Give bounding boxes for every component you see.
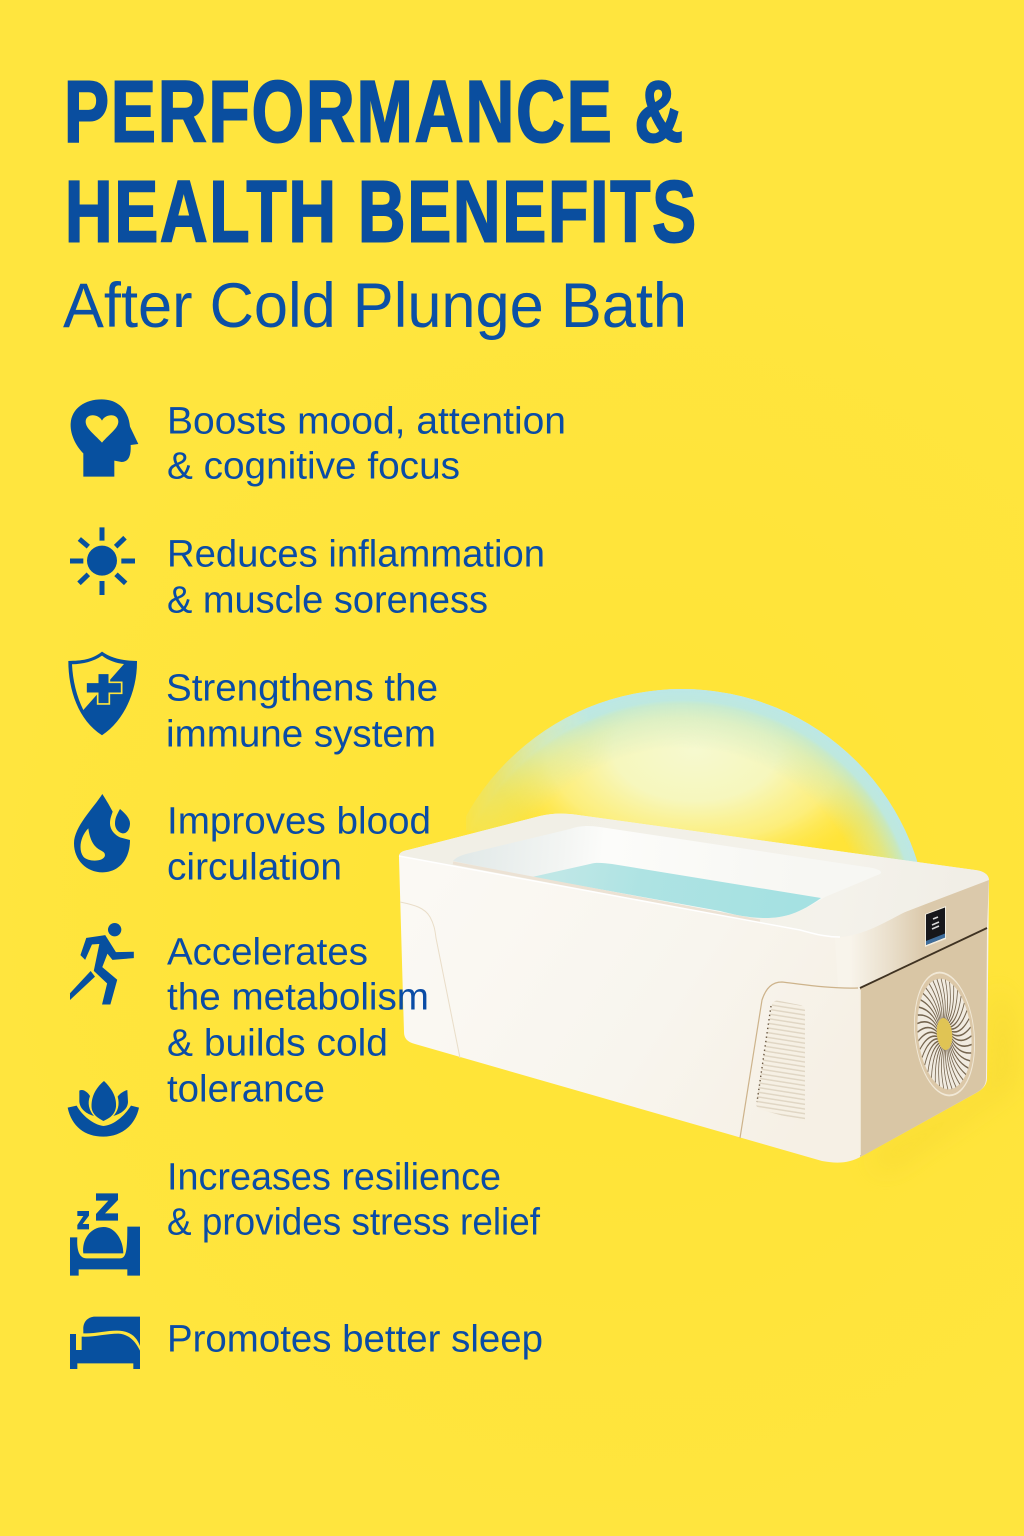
basin — [453, 826, 881, 918]
subtitle: After Cold Plunge Bath — [63, 271, 687, 341]
benefit: resilience and stress relief — [68, 1081, 540, 1244]
benefit: better sleep: Promotes better sleep — [167, 1318, 543, 1360]
benefit: mood and focus — [71, 399, 566, 488]
benefit: mood and focus: Boosts mood, attention — [167, 400, 566, 442]
dome over tub — [466, 689, 918, 862]
icon: shield with cross — [68, 652, 137, 735]
fan — [906, 961, 984, 1107]
icon: bed — [70, 1317, 140, 1369]
benefit: immune system: immune system — [166, 714, 436, 756]
benefit: resilience and stress relief: Increases resilience — [167, 1156, 501, 1198]
benefit: metabolism and cold tolerance: & builds cold — [167, 1022, 388, 1064]
panel seams — [400, 902, 987, 1155]
benefit: inflammation — [70, 527, 545, 622]
tub body — [399, 814, 989, 1163]
benefit: resilience and stress relief: & provides stress relief — [167, 1202, 540, 1244]
benefit: metabolism and cold tolerance: tolerance — [167, 1068, 325, 1110]
benefit: inflammation: & muscle soreness — [167, 580, 488, 622]
benefit: better sleep — [70, 1317, 543, 1369]
benefit: metabolism and cold tolerance — [70, 923, 429, 1110]
infographic canvas — [63, 80, 989, 1369]
benefit: metabolism and cold tolerance: the metabolism — [167, 976, 429, 1018]
benefit: mood and focus: & cognitive focus — [167, 446, 460, 488]
vent — [756, 1001, 805, 1122]
front lip highlights — [399, 856, 840, 937]
title — [64, 64, 698, 260]
title: PERFORMANCE & — [64, 64, 685, 160]
benefit: metabolism and cold tolerance: Accelerates — [167, 932, 368, 974]
tub rim top — [399, 814, 989, 937]
control display — [925, 906, 946, 947]
benefit: blood circulation: Improves blood — [167, 800, 431, 842]
product illustration: cold plunge tub — [399, 689, 1012, 1183]
benefit: blood circulation: circulation — [167, 846, 342, 888]
benefit: immune system: Strengthens the — [166, 668, 438, 710]
title: HEALTH BENEFITS — [65, 164, 698, 260]
water — [532, 863, 821, 918]
benefit: inflammation: Reduces inflammation — [167, 534, 545, 576]
icon: sleeping person in bed — [70, 1193, 140, 1276]
icon: runner — [70, 923, 133, 1004]
benefit: blood circulation — [74, 794, 431, 888]
benefit: immune system — [68, 652, 438, 756]
icon: water drops — [74, 794, 130, 872]
tub side panel — [860, 928, 987, 1157]
icon: sun — [70, 527, 135, 595]
icon: head with heart — [71, 399, 138, 477]
tub shadow — [870, 980, 1012, 1170]
icon: lotus — [68, 1081, 139, 1137]
tub upper band — [835, 879, 989, 988]
